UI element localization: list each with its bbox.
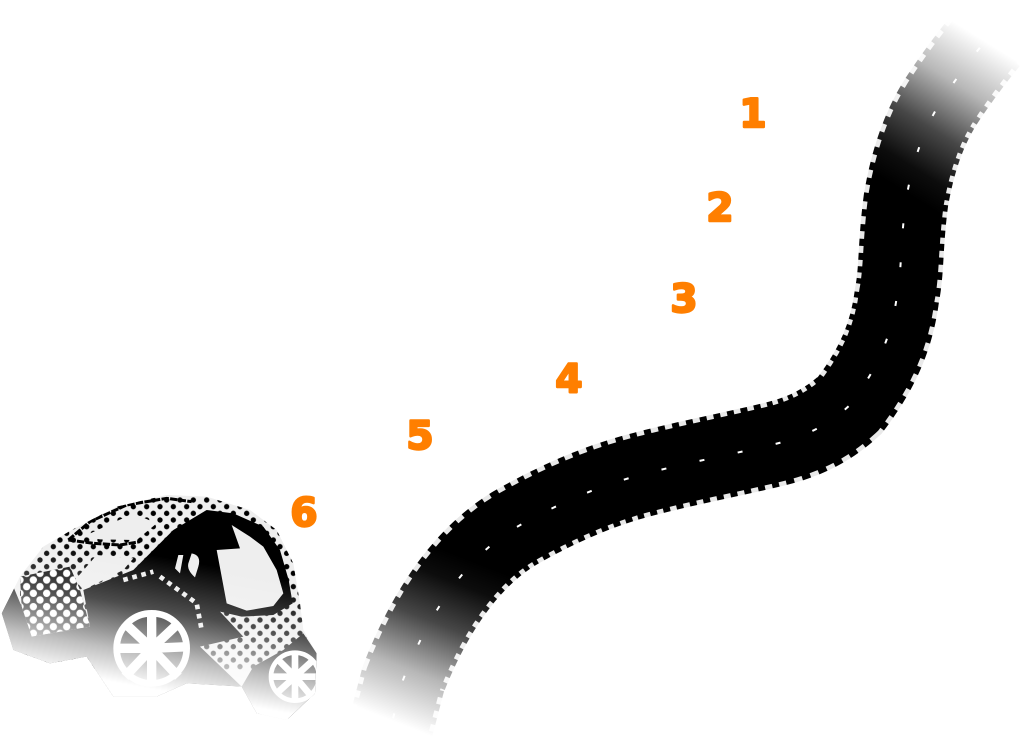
- dark body: [2, 510, 293, 697]
- clean roof panel: [86, 515, 156, 540]
- car body silhouette: [14, 495, 314, 654]
- number 1: 1: [739, 92, 767, 137]
- front wheel: [115, 612, 188, 685]
- door seam: [123, 572, 202, 630]
- car: [2, 495, 317, 718]
- number 3: 3: [670, 277, 698, 322]
- road centre lane markings: [390, 18, 1005, 730]
- rear bumper dark: [242, 633, 317, 723]
- car roof edge and crack: [68, 498, 192, 545]
- halftone dense lower left: [20, 567, 90, 637]
- number 6: 6: [290, 491, 318, 536]
- car fade: [2, 544, 316, 720]
- road: [325, 0, 1024, 756]
- windshield: [217, 525, 283, 611]
- clean side panel: [75, 555, 133, 590]
- side windows: [175, 553, 199, 577]
- halftone dots: [20, 497, 307, 670]
- number 4: 4: [555, 357, 583, 402]
- rear wheel: [271, 653, 319, 701]
- number 2: 2: [706, 186, 734, 231]
- number 5: 5: [406, 414, 434, 459]
